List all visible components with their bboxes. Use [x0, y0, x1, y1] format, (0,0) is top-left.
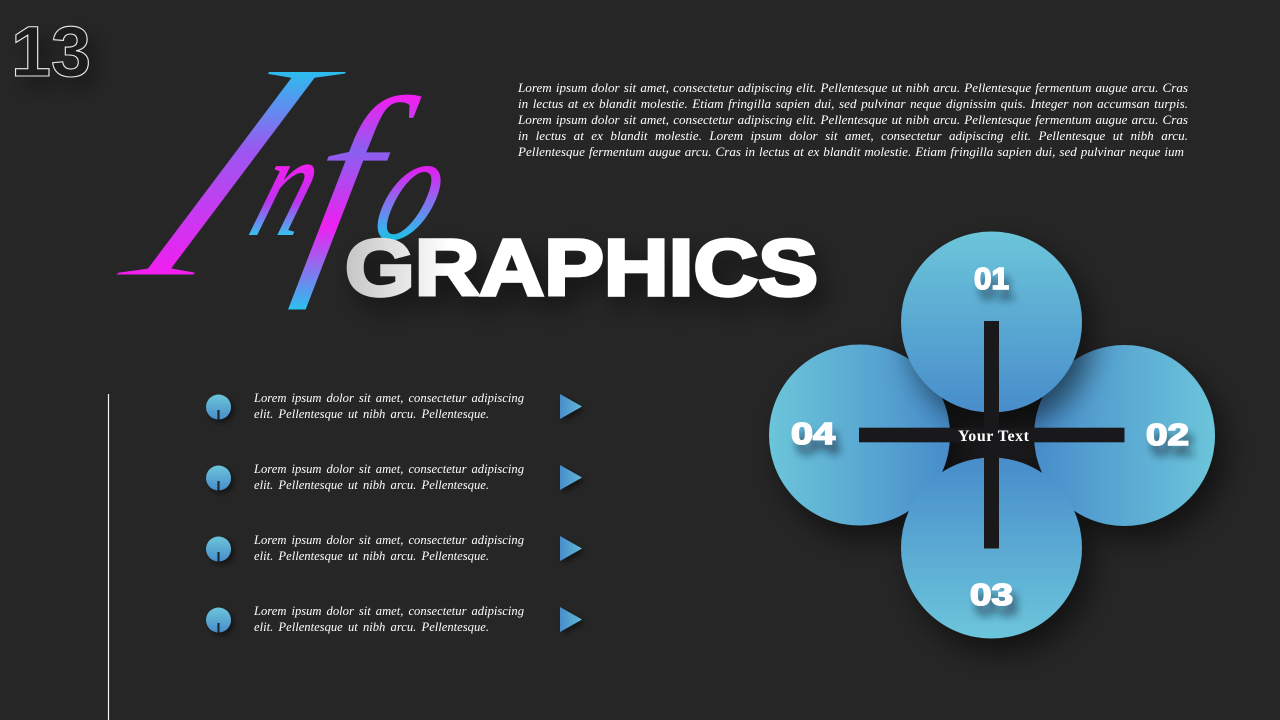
diagram centre	[935, 395, 1050, 480]
list text 1	[254, 391, 524, 421]
number 03: 03	[970, 577, 1013, 612]
number 01: 01	[974, 261, 1009, 296]
horizontal bar	[859, 428, 1124, 442]
title: GRAPHICS: GRAPHICS	[345, 223, 818, 312]
script title: Info: o	[355, 101, 475, 273]
intro paragraph: Lorem ipsum dolor sit amet, consectetur adipiscing elit. Pellentesque ut nibh arcu. Pellentesque fermentum augue arcu. Cras	[518, 112, 1188, 127]
script title: Info: n	[233, 103, 346, 268]
timeline rule	[108, 394, 110, 720]
four-petal diagram	[769, 232, 1215, 638]
list text 3: elit. Pellentesque ut nibh arcu. Pellentesque.	[254, 549, 489, 563]
list text 2: Lorem ipsum dolor sit amet, consectetur adipiscing	[254, 462, 524, 476]
list text 3: Lorem ipsum dolor sit amet, consectetur adipiscing	[254, 533, 524, 547]
arrow 1	[560, 394, 582, 419]
petal 04	[769, 344, 950, 526]
arrow 3	[560, 536, 582, 561]
arrow 2	[560, 465, 582, 490]
petal 02	[1034, 345, 1215, 526]
list text 3	[254, 533, 524, 563]
list text 1: Lorem ipsum dolor sit amet, consectetur adipiscing	[254, 391, 524, 405]
list text 2: elit. Pellentesque ut nibh arcu. Pellentesque.	[254, 478, 489, 492]
bullet 2	[206, 466, 231, 490]
list text 1: elit. Pellentesque ut nibh arcu. Pellentesque.	[254, 407, 489, 421]
bullet 1	[206, 394, 231, 420]
lower petals	[769, 344, 1215, 638]
vertical bar	[984, 321, 999, 548]
bullet 3	[206, 536, 231, 562]
bullet 4	[206, 608, 231, 632]
page number: 13	[11, 13, 91, 92]
arrow 4	[560, 607, 582, 632]
intro paragraph: Pellentesque fermentum augue arcu. Cras in lectus at ex blandit molestie. Etiam fringilla sapien dui, sed pulvinar neque ium	[518, 144, 1184, 159]
number 02: 02	[1146, 417, 1189, 452]
intro paragraph: in lectus at ex blandit molestie. Lorem ipsum dolor sit amet, consectetur adipiscing elit. Pellentesque ut nibh arcu.	[518, 128, 1188, 143]
petal 01	[901, 232, 1082, 412]
intro paragraph: in lectus at ex blandit molestie. Etiam fringilla sapien dui, sed pulvinar neque dignissim quis. Integer non accumsan turpis.	[518, 96, 1188, 111]
list text 4: Lorem ipsum dolor sit amet, consectetur adipiscing	[254, 604, 524, 618]
list text 4	[254, 604, 524, 634]
petal 03	[901, 458, 1082, 638]
script title: Info: I	[67, 0, 397, 347]
script title: Info: f	[284, 49, 433, 311]
centre text: Your Text	[958, 428, 1030, 445]
list text 4: elit. Pellentesque ut nibh arcu. Pellentesque.	[254, 620, 489, 634]
intro paragraph	[518, 80, 1188, 159]
list text 2	[254, 462, 524, 492]
intro paragraph: Lorem ipsum dolor sit amet, consectetur adipiscing elit. Pellentesque ut nibh arcu. Pellentesque fermentum augue arcu. Cras	[518, 80, 1188, 95]
number 04: 04	[791, 416, 836, 451]
